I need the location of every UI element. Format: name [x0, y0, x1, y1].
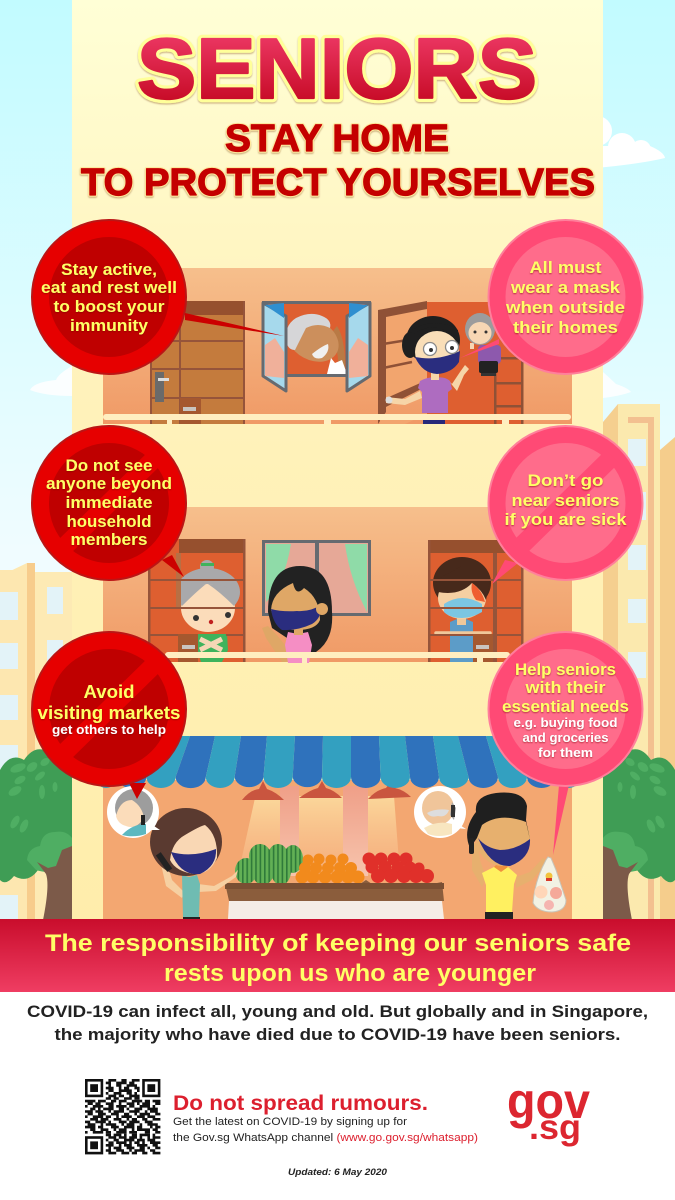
table cloth [228, 901, 444, 919]
callout: stay active: eat and rest well [41, 279, 177, 297]
callout: wear a mask: their homes [513, 319, 618, 337]
tree right [603, 749, 675, 920]
rumours message: the Gov.sg WhatsApp channel (www.go.gov.sg/whatsapp) [173, 1132, 478, 1144]
callout: stay active: to boost your [54, 298, 165, 316]
subtitle: STAY HOME [225, 118, 449, 160]
clouds [30, 116, 665, 398]
callout: help seniors: essential needs [502, 698, 629, 716]
callout: help seniors: Help seniors [515, 661, 616, 679]
man on phone [467, 793, 548, 920]
oranges [296, 854, 364, 884]
market awning [95, 736, 581, 788]
woman on phone [150, 808, 238, 920]
left casement [263, 303, 286, 391]
callout: wear a mask: wear a mask [510, 279, 621, 297]
callout: help seniors: and groceries [522, 730, 608, 745]
callout: don't go near seniors [488, 426, 642, 584]
older woman in doorway [465, 313, 501, 376]
market wall [103, 780, 572, 919]
floor 1 balcony rail [103, 414, 571, 424]
shopping bag [533, 857, 566, 912]
rumours message: Get the latest on COVID-19 by signing up for [173, 1116, 407, 1128]
subtitle: TO PROTECT YOURSELVES [81, 162, 595, 204]
callout: stay active: Stay active, [61, 261, 157, 279]
tree left [0, 749, 72, 920]
old man [280, 310, 347, 374]
updated date: Updated: 6 May 2020 [288, 1167, 388, 1178]
callout: avoid visiting markets: get others to help [52, 722, 166, 737]
banner text: The responsibility of keeping our seniors safe [45, 930, 631, 957]
left door [150, 301, 245, 424]
callout: do not see anyone: members [70, 531, 148, 549]
banner [0, 919, 675, 992]
background buildings right [603, 404, 675, 920]
callout: do not see anyone [32, 426, 186, 580]
right door with sick man [428, 540, 524, 662]
woman with long hair [262, 566, 332, 663]
explanation text: COVID-19 can infect all, young and old. But globally and in Singapore, [27, 1002, 648, 1021]
sky background [0, 0, 675, 920]
floor 2 wall [103, 507, 572, 662]
subtitle [81, 118, 595, 204]
callout: do not see anyone: anyone beyond [46, 475, 172, 493]
callout: wear a mask [460, 220, 642, 374]
gov.sg logo: gov [507, 1073, 590, 1129]
floor 2 balcony rail [165, 652, 510, 663]
callout: don't go near seniors: near seniors [512, 492, 620, 510]
window with green curtains [262, 540, 371, 616]
callout: help seniors: for them [538, 745, 593, 760]
open doorway [378, 301, 524, 424]
callout: stay active [32, 220, 284, 374]
rumours message [173, 1092, 478, 1144]
left door with grandmother [148, 539, 246, 662]
rumours message: Do not spread rumours. [173, 1092, 428, 1115]
callout: avoid visiting markets [32, 632, 186, 799]
callout: don't go near seniors: if you are sick [504, 511, 627, 529]
title: SENIORS: SENIORS [137, 22, 537, 117]
callout: do not see anyone: immediate [66, 494, 152, 512]
floor 2 apartment [103, 507, 572, 663]
title: SENIORS: SENIORS [137, 22, 537, 117]
callout: do not see anyone: Do not see [66, 457, 152, 475]
subtitle: TO PROTECT YOURSELVES [81, 162, 595, 204]
building facade [72, 0, 603, 920]
market lights [238, 781, 411, 876]
callout: do not see anyone: household [66, 513, 152, 531]
speech bubble: grandfather on phone [414, 786, 466, 838]
callout: help seniors [488, 632, 642, 855]
floor 1 wall [103, 268, 572, 424]
explanation text: the majority who have died due to COVID-19 have been seniors. [54, 1025, 620, 1044]
background buildings left [0, 563, 72, 920]
callout: wear a mask: All must [530, 259, 602, 277]
grandmother [176, 560, 240, 662]
callout: avoid visiting markets: visiting markets [38, 703, 180, 723]
callout: stay active: immunity [70, 317, 149, 335]
speech bubble: grandmother on phone [107, 786, 160, 838]
subtitle: STAY HOME [225, 118, 449, 160]
callout: help seniors: e.g. buying food [514, 715, 618, 730]
market stall [225, 844, 444, 919]
wooden crates [225, 880, 444, 901]
explanation text [27, 1002, 648, 1044]
floor 1 apartment [103, 268, 572, 424]
callout: don't go near seniors: Don’t go [528, 472, 604, 490]
banner text: rests upon us who are younger [164, 960, 536, 987]
callout: wear a mask: when outside [505, 299, 625, 317]
man with mask [386, 316, 469, 424]
gov.sg logo: .sg [529, 1108, 581, 1147]
right casement [347, 303, 370, 391]
callout: avoid visiting markets: Avoid [84, 682, 134, 702]
callout: help seniors: with their [524, 679, 606, 697]
watermelons [235, 844, 303, 885]
red tomatoes [362, 852, 434, 883]
sick man [433, 557, 491, 662]
QR code [85, 1080, 160, 1153]
window with old man [262, 301, 371, 391]
banner text [45, 930, 631, 987]
